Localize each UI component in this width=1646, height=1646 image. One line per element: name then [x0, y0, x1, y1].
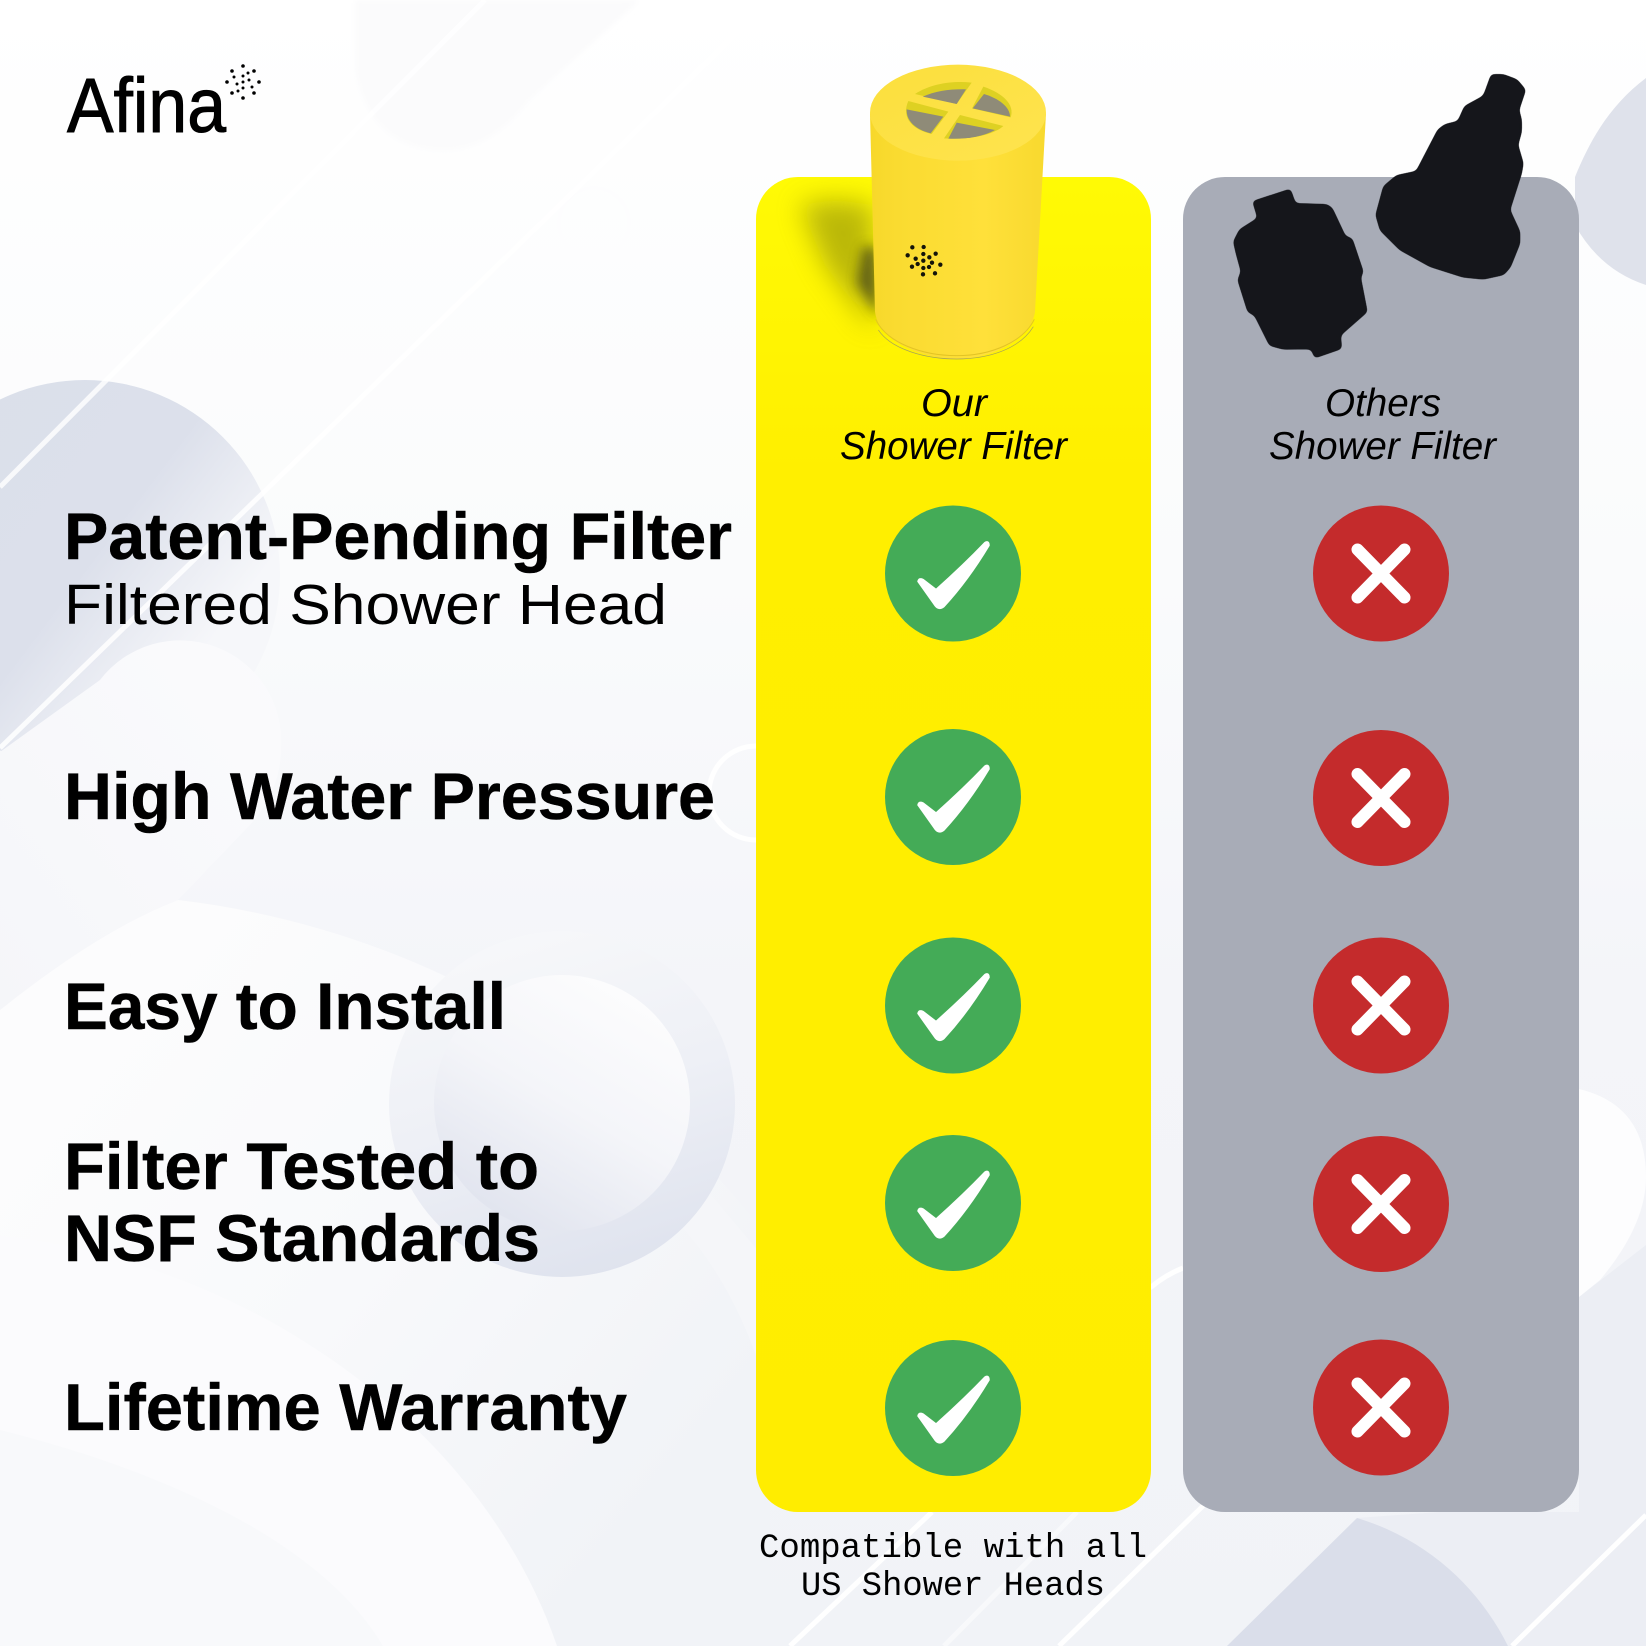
row label: high water pressure: High Water Pressure	[64, 759, 715, 833]
column heading: our shower filter	[840, 382, 1069, 468]
filter opening with mesh	[906, 82, 1012, 139]
panel: our shower filter	[756, 177, 1151, 1512]
row label: patent-pending filter	[64, 499, 732, 637]
icon: check 4	[885, 1135, 1021, 1271]
icon: cross 4	[1313, 1136, 1449, 1272]
row label: lifetime warranty: Lifetime Warranty	[64, 1370, 627, 1444]
row label: filter tested to NSF standards: NSF Standards	[64, 1201, 540, 1275]
check icons column	[885, 506, 1021, 1476]
icon: check 5	[885, 1340, 1021, 1476]
icon: cross 2	[1313, 730, 1449, 866]
icon: cross 5	[1313, 1340, 1449, 1476]
icon: check 2	[885, 729, 1021, 865]
column heading: our shower filter: Our	[921, 382, 989, 425]
compatibility note: Compatible with all	[759, 1530, 1147, 1568]
compatibility note: US Shower Heads	[801, 1568, 1105, 1606]
column heading: our shower filter: Shower Filter	[840, 425, 1069, 468]
row label: filter tested to NSF standards	[64, 1129, 540, 1275]
icon: dots on filter body	[905, 245, 942, 276]
cross icons column	[1313, 506, 1449, 1476]
row label: filter tested to NSF standards: Filter Tested to	[64, 1129, 539, 1203]
row label: patent-pending filter: Patent-Pending Filter	[64, 499, 732, 573]
icon: logo dots	[225, 64, 261, 100]
icon: cross 3	[1313, 938, 1449, 1074]
column heading: others shower filter	[1269, 382, 1498, 468]
icon: cross 1	[1313, 506, 1449, 642]
compatibility note	[759, 1530, 1147, 1606]
row label: easy to install: Easy to Install	[64, 969, 506, 1043]
silhouette: inline filter	[1234, 190, 1367, 357]
column heading: others shower filter: Others	[1325, 382, 1441, 425]
column heading: others shower filter: Shower Filter	[1269, 425, 1498, 468]
brand logo: Afina: Afina	[67, 63, 226, 149]
product: competitor silhouettes	[1234, 75, 1525, 357]
product: yellow cylinder filter	[870, 65, 1046, 359]
product shadow	[800, 200, 878, 330]
icon: check 1	[885, 506, 1021, 642]
row label: patent-pending filter: Filtered Shower Head	[64, 573, 667, 637]
icon: check 3	[885, 938, 1021, 1074]
silhouette: shower head	[1376, 75, 1525, 279]
panel: others shower filter	[1183, 177, 1579, 1512]
